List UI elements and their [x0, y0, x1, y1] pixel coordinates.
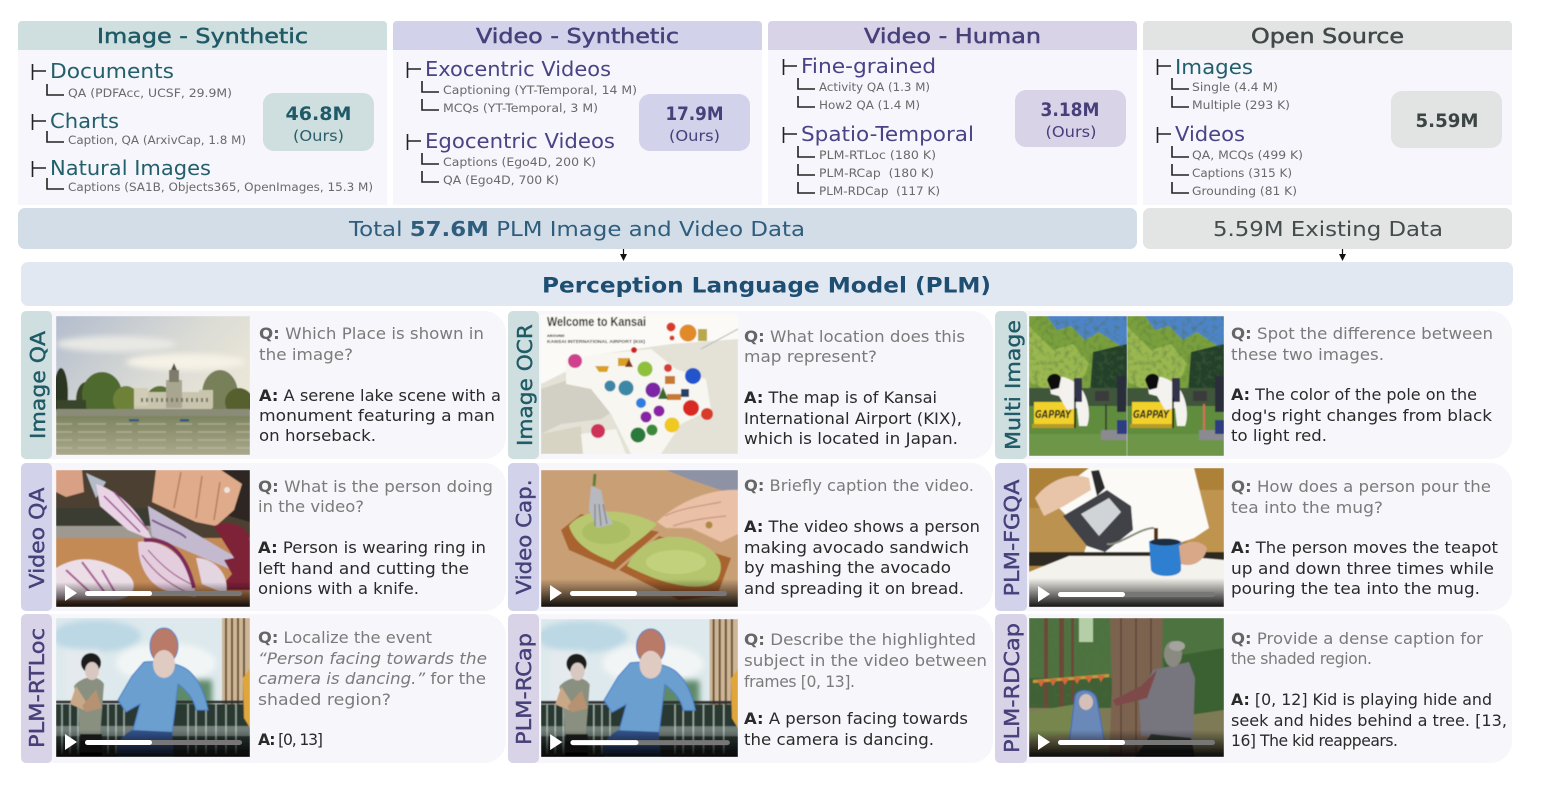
category tree: open source: Single (4.4 M)	[1192, 80, 1278, 94]
photo: dog, black pole: GAPPAY	[1035, 408, 1072, 421]
category tree: video human: How2 QA (1.4 M)	[819, 98, 920, 112]
question and answer	[1231, 478, 1498, 598]
category tree: open source: Grounding (81 K)	[1192, 184, 1297, 198]
question and answer: International Airport (KIX),	[744, 410, 962, 428]
category tree: video synthetic: Exocentric Videos	[425, 57, 611, 81]
question and answer	[258, 478, 493, 598]
panel: Video - Human	[768, 21, 1137, 205]
question and answer: frames [0, 13].	[744, 673, 855, 691]
category tree: image	[32, 59, 373, 194]
badge: 17.9M: 17.9M	[666, 103, 724, 125]
panel: Image - Synthetic	[18, 21, 387, 205]
category tree: video synthetic: QA (Ego4D, 700 K)	[443, 173, 559, 187]
map: Kansai: AROUND	[547, 334, 565, 338]
question and answer: the image?	[259, 346, 353, 364]
category tree: image: QA (PDFAcc, UCSF, 29.9M)	[68, 86, 232, 100]
photo pair: dog agility	[1029, 316, 1224, 456]
question and answer: A: [0, 13]	[258, 731, 323, 749]
label: PLM-RTLoc	[21, 614, 52, 763]
label: PLM-RCap: PLM-RCap	[512, 633, 536, 745]
badge: 5.59M	[1391, 91, 1502, 148]
question and answer: A: The person moves the teapot	[1231, 539, 1498, 557]
question and answer	[258, 629, 487, 749]
heading: Video - Synthetic: Video - Synthetic	[476, 24, 679, 48]
video controls	[550, 734, 730, 750]
question and answer	[744, 477, 980, 598]
card: Image OCR	[508, 311, 993, 459]
question and answer: A: A serene lake scene with a	[259, 387, 501, 405]
label: Video Cap.	[508, 463, 539, 611]
label: PLM-FGQA	[995, 463, 1027, 611]
question and answer: Q: Localize the event	[258, 629, 432, 647]
question and answer: A: A person facing towards	[744, 710, 968, 728]
photo: lake and monument	[56, 316, 250, 455]
question and answer: the shaded region.	[1231, 650, 1372, 668]
label: Video QA	[21, 463, 52, 611]
question and answer: and spreading it on bread.	[744, 580, 964, 598]
question and answer: the camera is dancing.	[744, 731, 934, 749]
banner: total PLM data	[18, 208, 1137, 249]
label: Image OCR: Image OCR	[513, 324, 537, 446]
question and answer: to light red.	[1231, 427, 1327, 445]
card: PLM-RCap	[508, 614, 993, 763]
label: Video Cap.: Video Cap.	[512, 480, 536, 594]
card: PLM-RDCap	[995, 614, 1512, 763]
category tree: video human: PLM-RTLoc (180 K)	[819, 148, 936, 162]
question and answer: A: The video shows a person	[744, 518, 980, 536]
question and answer: up and down three times while	[1231, 560, 1494, 578]
question and answer: A: The color of the pole on the	[1231, 386, 1477, 404]
question and answer: Q: Which Place is shown in	[259, 325, 484, 343]
video: pouring tea	[1029, 468, 1224, 607]
question and answer	[744, 328, 965, 448]
category tree: video synthetic: Captions (Ego4D, 200 K)	[443, 155, 596, 169]
category tree: image: Natural Images	[50, 156, 211, 180]
photo: dog, light red pole	[1127, 316, 1224, 456]
question and answer: A: [0, 12] Kid is playing hide and	[1231, 691, 1492, 709]
panel: Open Source	[1143, 21, 1512, 205]
heading: Video - Human	[768, 21, 1137, 50]
question and answer: onions with a knife.	[258, 580, 419, 598]
question and answer: seek and hides behind a tree. [13,	[1231, 712, 1507, 730]
question and answer: Q: Spot the difference between	[1231, 325, 1493, 343]
banner: existing data	[1143, 208, 1512, 249]
video: cutting onions	[56, 470, 250, 607]
heading: Open Source: Open Source	[1251, 24, 1404, 48]
video: dancing person highlighted	[541, 619, 738, 757]
category tree: video synthetic: MCQs (YT-Temporal, 3 M)	[443, 101, 598, 115]
question and answer: monument featuring a man	[259, 407, 495, 425]
category tree: video human: PLM-RDCap (117 K)	[819, 184, 940, 198]
category tree: image: Caption, QA (ArxivCap, 1.8 M)	[68, 133, 246, 147]
label: Multi Image: Multi Image	[1001, 320, 1025, 450]
question and answer: shaded region?	[258, 691, 391, 709]
badge: 3.18M: (Ours)	[1046, 123, 1096, 141]
category tree: video human: Spatio-Temporal	[801, 122, 974, 146]
question and answer: Q: Briefly caption the video.	[744, 477, 974, 495]
badge: 17.9M: (Ours)	[669, 127, 720, 145]
question and answer: subject in the video between	[744, 652, 987, 670]
question and answer	[1231, 325, 1493, 445]
label: Image QA	[21, 311, 52, 459]
label: Image OCR	[508, 311, 539, 459]
question and answer: Q: Provide a dense caption for	[1231, 630, 1484, 648]
category tree: video human: Fine-grained	[801, 54, 936, 78]
badge: 5.59M: 5.59M	[1416, 110, 1478, 132]
video controls	[550, 585, 727, 601]
video: avocado toast	[541, 470, 738, 607]
model bar: Perception Language Model: Perception Language Model (PLM)	[542, 274, 991, 298]
card: Image QA	[21, 311, 506, 459]
card: PLM-RTLoc	[21, 614, 506, 763]
heading: Image - Synthetic	[18, 21, 387, 50]
category tree: image: Captions (SA1B, Objects365, OpenImages, 15.3 M)	[68, 180, 373, 194]
category tree: video human	[784, 54, 974, 198]
category tree: image: Documents	[50, 59, 174, 83]
question and answer: map represent?	[744, 348, 877, 366]
category tree: video synthetic: Captioning (YT-Temporal, 14 M)	[443, 83, 637, 97]
question and answer: left hand and cutting the	[258, 560, 469, 578]
question and answer: Q: What is the person doing	[258, 478, 493, 496]
label: PLM-RDCap: PLM-RDCap	[1000, 623, 1024, 753]
badge: 17.9M	[639, 94, 750, 151]
label: PLM-FGQA: PLM-FGQA	[1000, 479, 1024, 597]
card: Video QA	[21, 463, 506, 611]
question and answer	[259, 325, 501, 445]
category tree: video synthetic	[408, 57, 637, 187]
category tree: video human: PLM-RCap (180 K)	[819, 166, 934, 180]
panel: Video - Synthetic	[393, 21, 762, 205]
question and answer: which is located in Japan.	[744, 430, 958, 448]
question and answer: these two images.	[1231, 346, 1384, 364]
map: Kansai	[541, 315, 738, 454]
banner: total PLM data: Total 57.6M PLM Image and Video Data	[348, 217, 805, 241]
question and answer	[744, 631, 987, 749]
question and answer: making avocado sandwich	[744, 539, 969, 557]
video controls	[1038, 586, 1215, 602]
question and answer: Q: Describe the highlighted	[744, 631, 976, 649]
question and answer: A: Person is wearing ring in	[258, 539, 486, 557]
model bar: Perception Language Model	[21, 262, 1513, 306]
badge: 46.8M	[263, 93, 374, 151]
map: Kansai: KANSAI INTERNATIONAL AIRPORT (KIX)	[547, 339, 646, 344]
label: Video QA: Video QA	[25, 487, 49, 589]
question and answer: tea into the mug?	[1231, 499, 1383, 517]
question and answer: Q: How does a person pour the	[1231, 478, 1491, 496]
badge: 3.18M: 3.18M	[1040, 99, 1100, 121]
heading: Video - Human: Video - Human	[864, 24, 1041, 48]
photo: dog, light red pole: GAPPAY	[1133, 408, 1170, 421]
question and answer: in the video?	[258, 498, 364, 516]
label: PLM-RCap	[508, 614, 539, 763]
question and answer: Q: What location does this	[744, 328, 965, 346]
question and answer: “Person facing towards the	[258, 650, 487, 668]
heading: Open Source	[1143, 21, 1512, 50]
question and answer: A: The map is of Kansai	[744, 389, 937, 407]
map: Kansai: Welcome to Kansai	[547, 315, 646, 329]
question and answer	[1231, 630, 1507, 750]
heading: Image - Synthetic: Image - Synthetic	[97, 24, 308, 48]
video controls	[65, 585, 242, 601]
question and answer: on horseback.	[259, 427, 376, 445]
card: Video Cap.	[508, 463, 993, 611]
heading: Video - Synthetic	[393, 21, 762, 50]
label: Image QA: Image QA	[26, 331, 50, 439]
label: Multi Image	[995, 311, 1027, 459]
question and answer: dog's right changes from black	[1231, 407, 1492, 425]
category tree: open source: Images	[1175, 55, 1253, 79]
question and answer: by mashing the avocado	[744, 559, 951, 577]
card: PLM-FGQA	[995, 463, 1512, 611]
category tree: open source: Captions (315 K)	[1192, 166, 1292, 180]
category tree: video synthetic: Egocentric Videos	[425, 129, 615, 153]
badge: 46.8M: (Ours)	[293, 127, 344, 145]
question and answer: pouring the tea into the mug.	[1231, 580, 1480, 598]
arrow: total to model	[620, 249, 627, 261]
badge: 46.8M: 46.8M	[286, 103, 352, 125]
photo: dog, black pole	[1029, 316, 1127, 456]
category tree: open source: Multiple (293 K)	[1192, 98, 1290, 112]
video: dancing person	[56, 618, 250, 757]
badge: 3.18M	[1015, 90, 1126, 147]
category tree: open source	[1158, 55, 1303, 198]
card: Multi Image	[995, 311, 1512, 459]
category tree: image: Charts	[50, 109, 119, 133]
banner: existing data: 5.59M Existing Data	[1213, 217, 1443, 241]
label: PLM-RTLoc: PLM-RTLoc	[25, 628, 49, 748]
category tree: video human: Activity QA (1.3 M)	[819, 80, 930, 94]
category tree: open source: QA, MCQs (499 K)	[1192, 148, 1303, 162]
label: PLM-RDCap	[995, 614, 1027, 763]
category tree: open source: Videos	[1175, 122, 1245, 146]
video controls	[65, 734, 242, 750]
arrow: existing to model	[1339, 249, 1346, 261]
question and answer: 16] The kid reappears.	[1231, 732, 1398, 750]
video: kid behind tree	[1029, 618, 1224, 757]
question and answer: camera is dancing.” for the	[258, 670, 486, 688]
video controls	[1038, 734, 1215, 750]
